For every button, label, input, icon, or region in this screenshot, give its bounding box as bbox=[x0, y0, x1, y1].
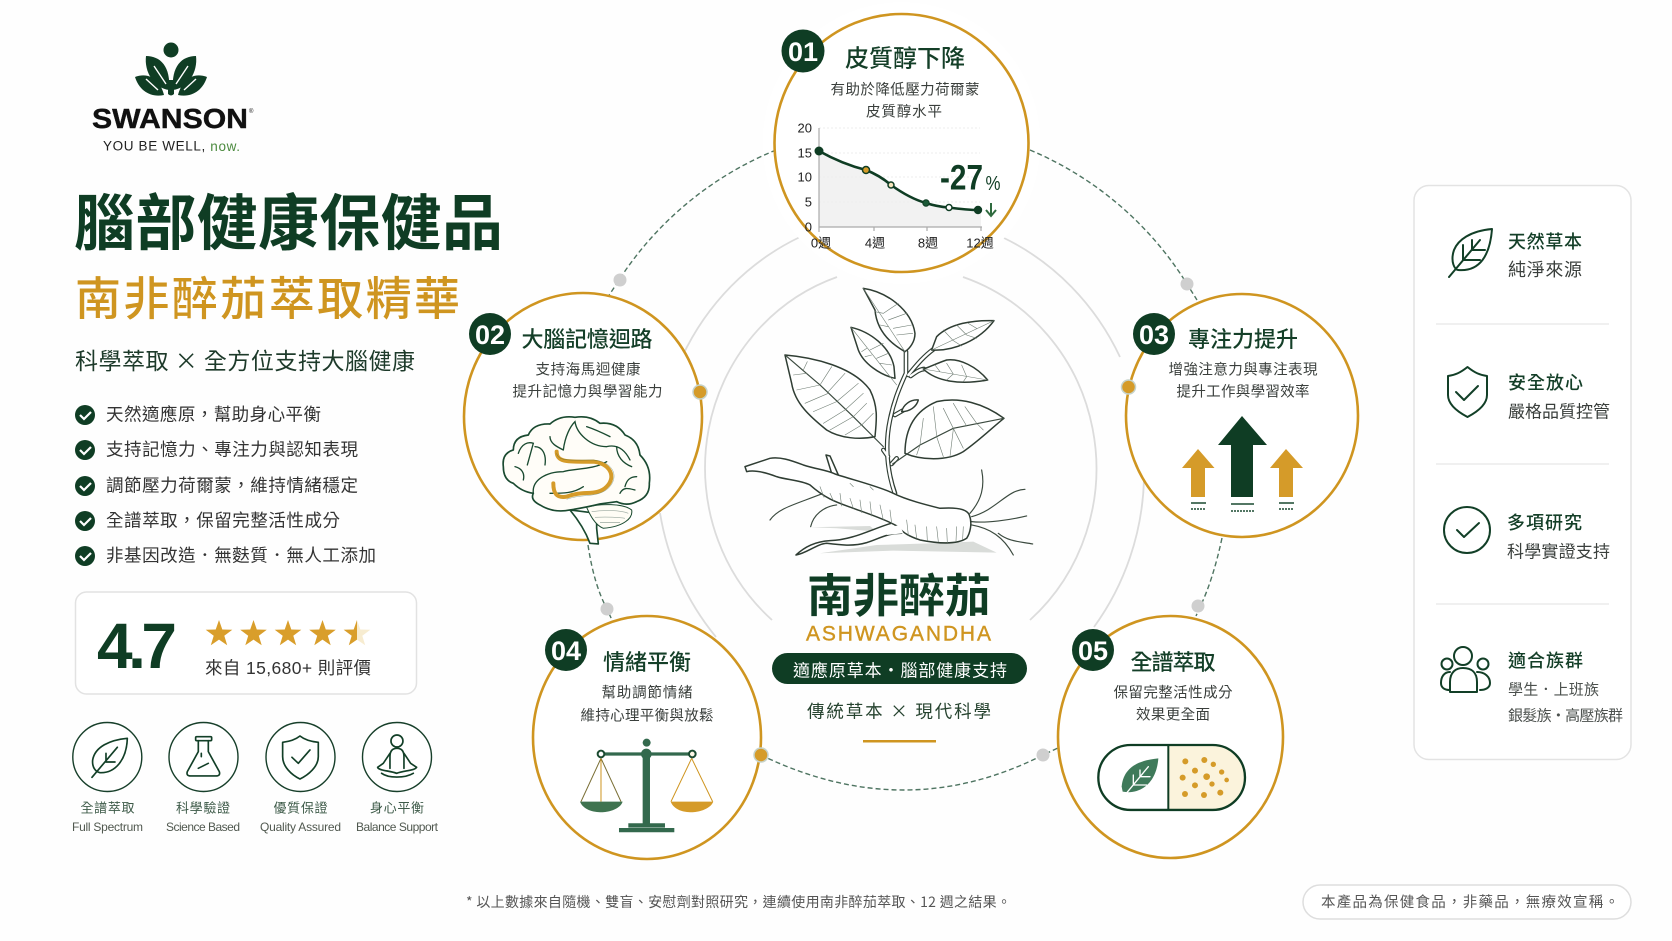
dashed connectors bbox=[588, 150, 1222, 790]
badge: balance bbox=[356, 722, 439, 834]
connector dots bbox=[600, 274, 1204, 762]
logo mark bbox=[135, 42, 207, 96]
badge: full spectrum bbox=[72, 722, 143, 834]
item: target groups: 適合族群 bbox=[1508, 647, 1583, 673]
down arrow bbox=[986, 203, 996, 216]
badge: quality bbox=[260, 722, 341, 834]
number badge: 02 bbox=[475, 320, 505, 350]
heading: 情緒平衡 bbox=[603, 645, 691, 677]
badge: full spectrum: 全譜萃取 bbox=[80, 798, 134, 816]
cortisol line chart: 0週 bbox=[811, 236, 831, 250]
circle 01: cortisol bbox=[774, 14, 1028, 272]
description: 增強注意力與專注表現 bbox=[1168, 358, 1318, 380]
number badge bbox=[1072, 629, 1114, 671]
icon: brain bbox=[503, 417, 650, 544]
icon: rising arrows bbox=[1182, 416, 1303, 511]
heading: 專注力提升 bbox=[1188, 322, 1298, 354]
item: research: 科學實證支持 bbox=[1507, 538, 1610, 562]
tagline: YOU BE WELL, now. bbox=[103, 138, 240, 154]
item: target groups bbox=[1441, 647, 1623, 726]
right panel: trust points bbox=[1414, 186, 1631, 760]
number badge: 03 bbox=[1139, 320, 1169, 350]
rating score: 4.7 bbox=[97, 610, 177, 682]
wordmark: SWANSON bbox=[92, 103, 248, 134]
cortisol line chart: 15 bbox=[798, 146, 812, 160]
item: research: 多項研究 bbox=[1507, 509, 1582, 535]
circle 04: mood bbox=[533, 616, 768, 859]
item: safety: 安全放心 bbox=[1508, 369, 1583, 395]
subtitle gold: 南非醉茄萃取精華 bbox=[75, 263, 460, 329]
connector gold dot bbox=[693, 385, 707, 399]
rating card bbox=[76, 592, 416, 694]
item 2: 支持記憶力、專注力與認知表現 bbox=[106, 436, 358, 462]
-27% callout: -27 bbox=[940, 158, 983, 198]
cortisol line chart: 12週 bbox=[966, 236, 994, 250]
circle 02: memory bbox=[464, 293, 707, 544]
badge: balance: Balance Support bbox=[356, 820, 439, 834]
item: natural herbs bbox=[1449, 228, 1582, 282]
background rings bbox=[660, 237, 1144, 637]
stars bbox=[206, 620, 370, 645]
cortisol line chart: 8週 bbox=[918, 236, 938, 250]
main root bbox=[745, 455, 971, 555]
item 4: 全譜萃取，保留完整活性成分 bbox=[106, 508, 340, 532]
cortisol line chart: 10 bbox=[798, 170, 812, 184]
cortisol line chart: 4週 bbox=[865, 236, 885, 250]
circle 04: mood: 維持心理平衡與放鬆 bbox=[580, 704, 714, 726]
benefit list bbox=[75, 402, 376, 568]
circle 05: full spectrum: 效果更全面 bbox=[1136, 704, 1210, 724]
badge: science: Science Based bbox=[166, 820, 240, 834]
badge: science bbox=[166, 722, 240, 834]
number badge bbox=[545, 629, 587, 671]
side rootlets bbox=[770, 470, 1033, 555]
cortisol line chart: 5 bbox=[805, 194, 812, 210]
center: english name: ASHWAGANDHA bbox=[806, 622, 991, 646]
description: 保留完整活性成分 bbox=[1114, 682, 1233, 702]
item: research bbox=[1444, 507, 1610, 562]
circle 05: full spectrum bbox=[1058, 616, 1283, 858]
connector gold dot bbox=[754, 748, 768, 762]
center: pill label bbox=[772, 653, 1027, 684]
heading: 大腦記憶迴路 bbox=[522, 322, 652, 354]
item 1: 天然適應原，幫助身心平衡 bbox=[106, 402, 321, 426]
badges row bbox=[72, 722, 439, 834]
description: 幫助調節情緒 bbox=[602, 682, 692, 702]
item: natural herbs: 純淨來源 bbox=[1508, 256, 1582, 282]
circle 02: memory: 提升記憶力與學習能力 bbox=[512, 380, 662, 402]
badge: science: 科學驗證 bbox=[176, 798, 230, 816]
badge: quality: 優質保證 bbox=[274, 798, 328, 816]
title: 腦部健康保健品 bbox=[74, 174, 503, 262]
item 5: 非基因改造．無麩質．無人工添加 bbox=[106, 542, 376, 568]
disclaimer pill bbox=[1303, 885, 1631, 919]
heading: 全譜萃取 bbox=[1130, 645, 1216, 677]
number badge: 04 bbox=[551, 636, 581, 666]
number badge: 01 bbox=[788, 37, 818, 67]
connector gold dot bbox=[1122, 380, 1136, 394]
icon: capsule bbox=[1098, 745, 1245, 810]
circle 03: focus bbox=[1122, 294, 1358, 537]
description: 有助於降低壓力荷爾蒙 bbox=[830, 78, 980, 100]
number badge bbox=[1133, 313, 1175, 355]
icon: balance scale bbox=[580, 739, 713, 832]
center: plant name: 南非醉茄 bbox=[807, 560, 991, 626]
item: natural herbs: 天然草本 bbox=[1508, 228, 1582, 254]
number badge bbox=[782, 30, 824, 72]
item: target groups: 銀髮族‧高壓族群 bbox=[1508, 704, 1623, 726]
cortisol line chart: 0 bbox=[805, 220, 812, 234]
heading: 皮質醇下降 bbox=[845, 38, 965, 74]
center: tagline: 傳統草本 × 現代科學 bbox=[807, 698, 991, 724]
item: safety bbox=[1448, 367, 1610, 422]
cortisol line chart: 20 bbox=[798, 120, 812, 136]
cortisol line chart: % bbox=[986, 173, 1001, 195]
number badge bbox=[469, 313, 511, 355]
center: pill label: 適應原草本・腦部健康支持 bbox=[793, 656, 1007, 682]
center: ashwagandha plant illustration bbox=[745, 288, 1033, 555]
center: gold rule bbox=[863, 740, 936, 742]
badge: quality: Quality Assured bbox=[260, 820, 341, 834]
tagline: 科學萃取 × 全方位支持大腦健康 bbox=[75, 342, 415, 376]
item 3: 調節壓力荷爾蒙，維持情緒穩定 bbox=[106, 472, 358, 498]
circle 01: cortisol: 皮質醇水平 bbox=[866, 100, 942, 122]
leaves bbox=[785, 288, 1004, 464]
number badge: 05 bbox=[1078, 636, 1108, 666]
ground shadow bbox=[810, 526, 997, 553]
disclaimer pill: 本產品為保健食品，非藥品，無療效宣稱。 bbox=[1321, 891, 1619, 912]
description: 支持海馬迴健康 bbox=[536, 358, 640, 380]
badge: balance: 身心平衡 bbox=[370, 798, 424, 816]
circle 03: focus: 提升工作與學習效率 bbox=[1176, 380, 1310, 402]
item: safety: 嚴格品質控管 bbox=[1508, 398, 1610, 422]
footnote: * 以上數據來自隨機、雙盲、安慰劑對照研究，連續使用南非醉茄萃取、12 週之結果。 bbox=[466, 892, 1011, 912]
cortisol line chart bbox=[798, 120, 1001, 250]
logo: Swanson bbox=[92, 42, 254, 154]
review count: 來自 15,680+ 則評價 bbox=[205, 658, 371, 678]
root texture bbox=[820, 483, 963, 543]
badge: full spectrum: Full Spectrum bbox=[72, 820, 143, 834]
item: target groups: 學生．上班族 bbox=[1508, 678, 1599, 700]
stem bbox=[883, 349, 933, 494]
registered mark: ® bbox=[249, 108, 254, 115]
